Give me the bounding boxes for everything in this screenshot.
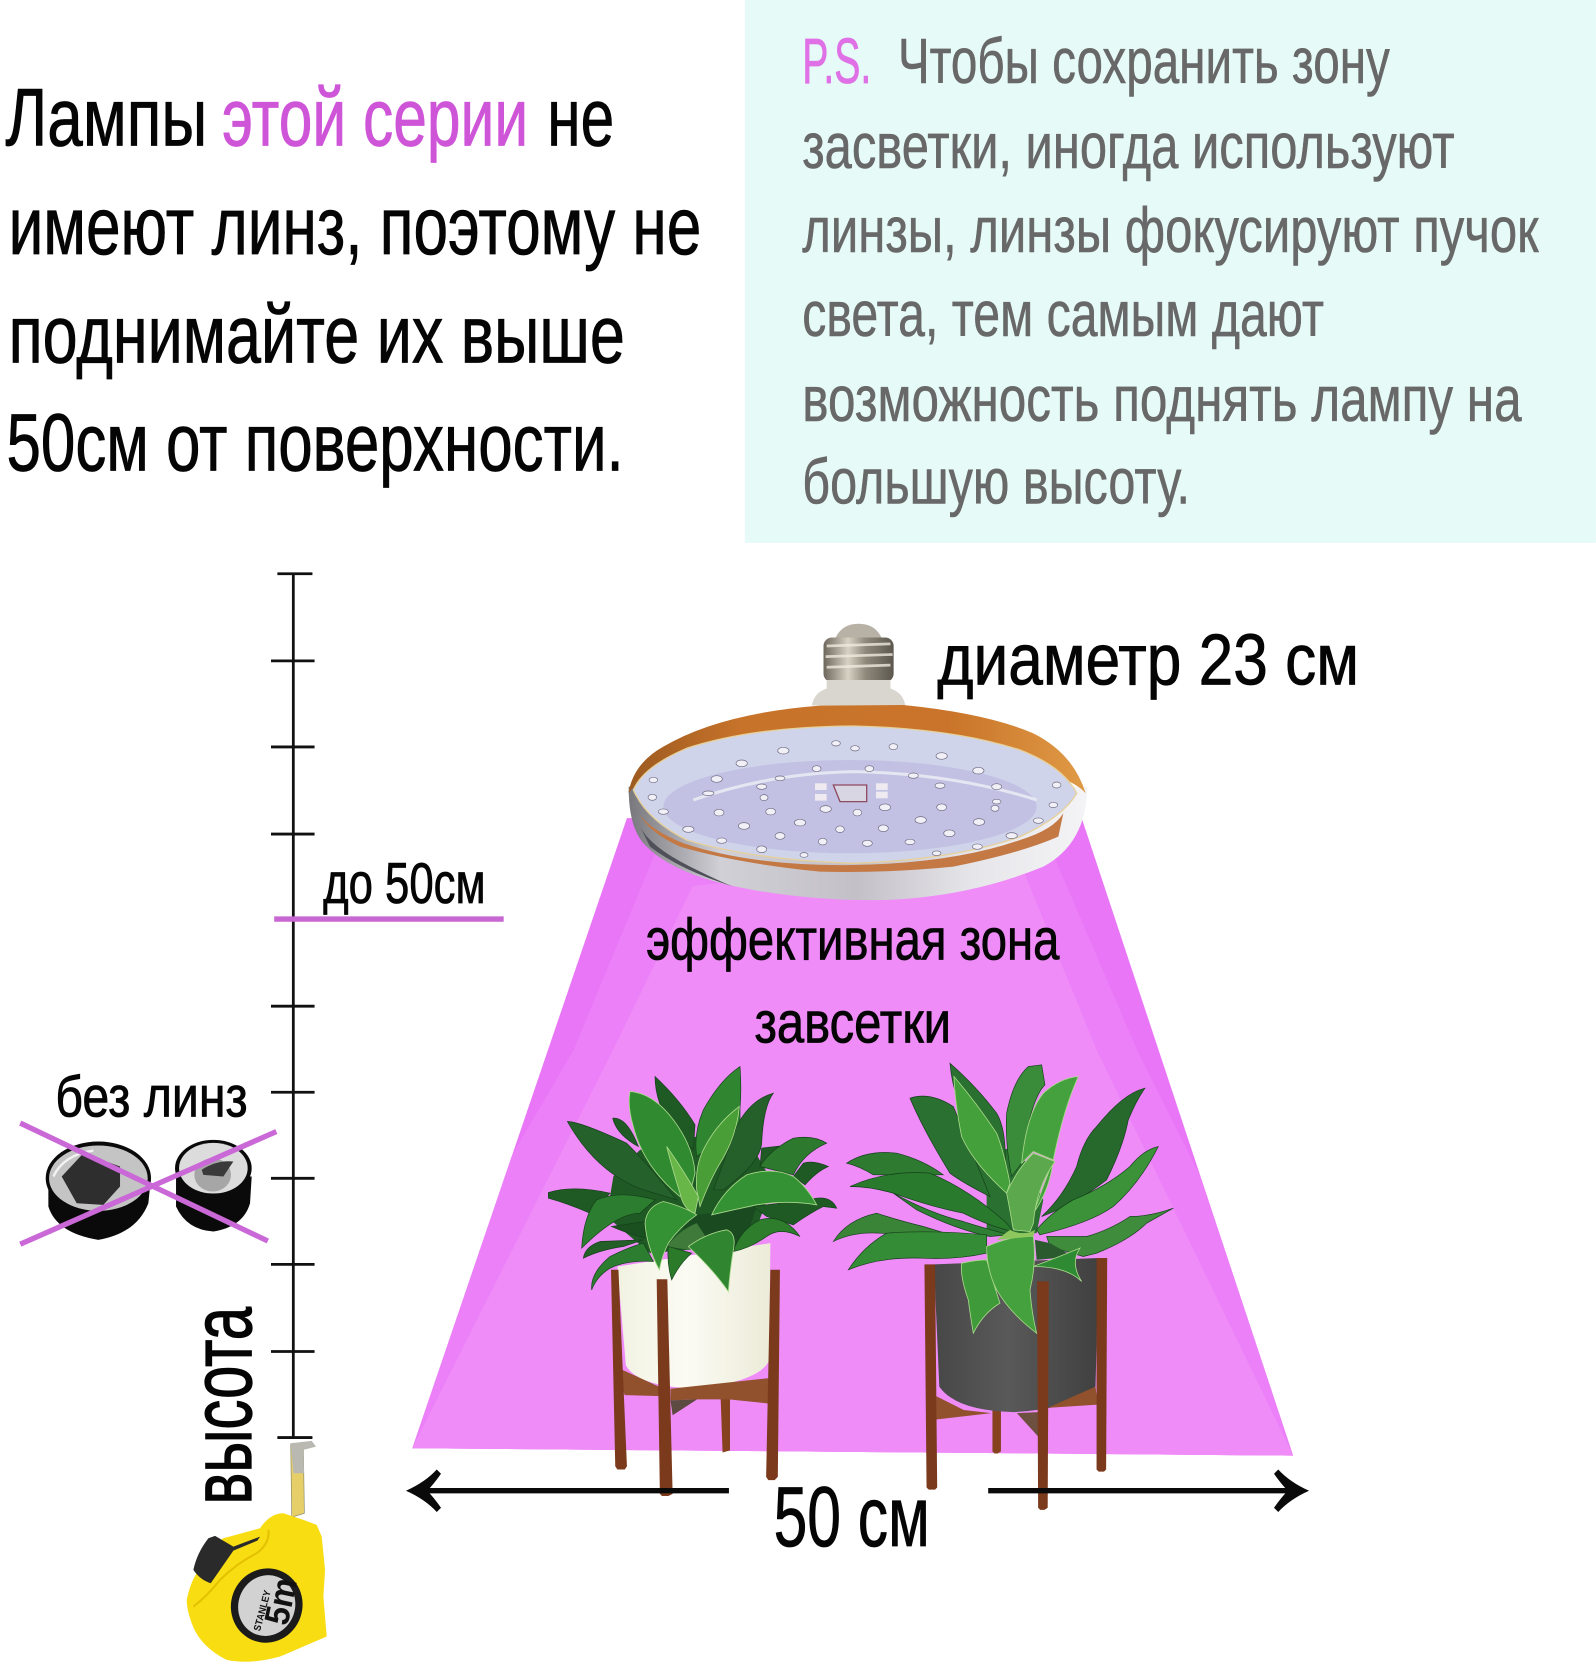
- glass cover: [633, 726, 1077, 863]
- heading: lamps without lenses: имеют линз, поэтому не: [9, 181, 701, 272]
- wooden legs: [611, 1270, 780, 1496]
- heading: lamps without lenses: поднимайте их выше: [9, 289, 625, 380]
- heading: lamps without lenses: 50см от поверхности.: [6, 398, 624, 489]
- plant: left with white pot: [548, 1067, 837, 1496]
- text block: P.S. note: большую высоту.: [802, 446, 1190, 518]
- label: up to 50 cm: до 50см: [323, 852, 486, 916]
- foliage: [833, 1063, 1173, 1333]
- orange rim: [628, 705, 1086, 793]
- foliage: [548, 1067, 837, 1292]
- icon: pink cross: [20, 1123, 276, 1244]
- lamp base E27: [812, 624, 905, 706]
- arrow: left: [406, 1469, 729, 1512]
- grey pot: [934, 1258, 1099, 1412]
- light cone: effective illumination zone: [412, 818, 1293, 1456]
- copper lower ring: [638, 813, 1063, 872]
- lamp disc: [628, 705, 1087, 900]
- label: diameter: диаметр 23 см: [937, 620, 1359, 700]
- white pot: [617, 1243, 770, 1389]
- central LED chip: [815, 783, 888, 802]
- icon: tape measure: 5m: [258, 1575, 305, 1628]
- icon: left lens: [46, 1142, 151, 1240]
- icon: tape measure: STANLEY: [252, 1589, 274, 1632]
- heading: lamps without lenses: [5, 73, 701, 489]
- label: effective illumination zone: эффективная зона: [646, 907, 1060, 972]
- arrow: right: [988, 1469, 1309, 1512]
- text block: P.S. note: [802, 25, 1539, 518]
- heading: lamps without lenses: не: [547, 73, 614, 164]
- icon: right lens: [175, 1140, 252, 1232]
- ruler: height scale: [271, 574, 315, 1438]
- label: 50 cm width: 50 см: [774, 1470, 930, 1565]
- text block: P.S. note: света, тем самым дают: [802, 278, 1324, 350]
- heading: lamps without lenses: Лампы: [5, 73, 207, 164]
- plant: right with grey pot: [833, 1063, 1173, 1510]
- label: effective illumination zone: [646, 907, 1060, 1055]
- marker: 50 cm limit line: [274, 917, 504, 922]
- label: effective illumination zone: завсетки: [754, 990, 951, 1055]
- silver dome: [629, 787, 1087, 900]
- stand back leg: [720, 1392, 730, 1452]
- LED dots: [648, 741, 1061, 857]
- panel: P.S. background: [745, 0, 1596, 543]
- label: without lenses: без линз: [55, 1066, 248, 1130]
- wooden crossbars: [620, 1368, 769, 1415]
- stand back leg: [992, 1408, 1001, 1454]
- wooden legs: [924, 1258, 1107, 1510]
- heading: lamps without lenses: этой серии: [222, 73, 528, 164]
- text block: P.S. note: Чтобы сохранить зону: [898, 25, 1390, 97]
- wooden crossbars: [936, 1387, 1098, 1436]
- label: height (vertical): высота: [175, 1306, 270, 1504]
- icon: tape measure: [187, 1441, 327, 1662]
- text block: P.S. note: P.S.: [802, 25, 871, 97]
- lamp: UFO grow bulb: [628, 624, 1087, 900]
- icon: crossed-out lenses: [20, 1123, 276, 1244]
